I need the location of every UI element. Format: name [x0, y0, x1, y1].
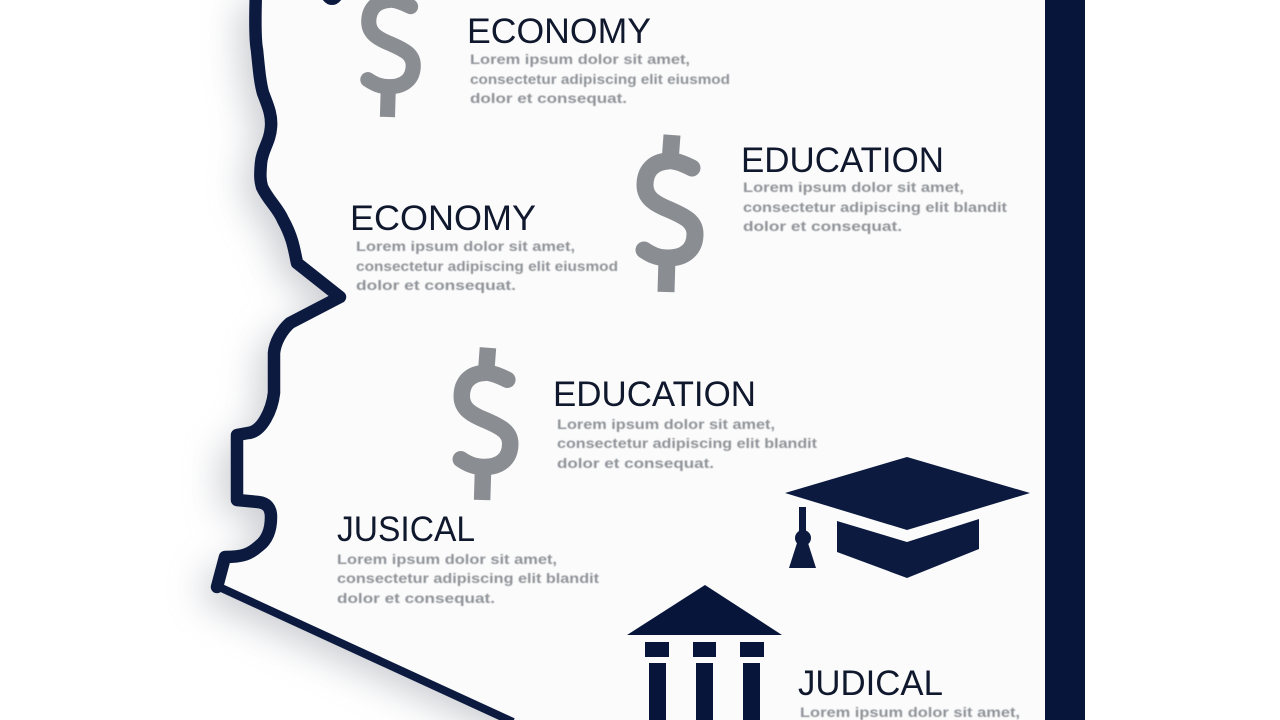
body text: dolor et consequat. — [743, 218, 902, 234]
body text: Lorem ipsum dolor sit amet, — [470, 51, 690, 67]
body text: consectetur adipiscing elit eiusmod — [356, 258, 618, 274]
text block: judical — [798, 664, 1020, 720]
right navy bar — [1045, 0, 1085, 720]
icon: dollar sign 3 — [461, 348, 510, 500]
body text: Lorem ipsum dolor sit amet, — [557, 416, 775, 432]
icon: courthouse pillars — [627, 585, 782, 720]
text block: economy middle — [350, 199, 618, 293]
text block: education lower — [553, 375, 817, 471]
body text: consectetur adipiscing elit blandit — [743, 199, 1007, 215]
icon: graduation cap — [785, 457, 1030, 578]
body text — [356, 238, 618, 293]
body text — [470, 51, 730, 106]
heading: economy: ECONOMY — [467, 12, 651, 51]
icon: dollar sign 2 — [644, 135, 695, 292]
icon: dollar sign 1 — [368, 0, 413, 117]
heading: jusical: JUSICAL — [337, 510, 475, 549]
body text: Lorem ipsum dolor sit amet, — [337, 551, 557, 567]
body text: consectetur adipiscing elit blandit — [337, 570, 599, 586]
heading: judical: JUDICAL — [798, 664, 943, 703]
heading: education: EDUCATION — [553, 375, 756, 414]
text block: economy top — [467, 12, 730, 106]
body text: Lorem ipsum dolor sit amet, — [800, 704, 1020, 720]
heading: education: EDUCATION — [741, 141, 944, 180]
body text: dolor et consequat. — [557, 455, 714, 471]
heading: economy: ECONOMY — [350, 199, 536, 238]
body text — [557, 416, 817, 471]
body text: dolor et consequat. — [470, 90, 627, 106]
text block: jusical — [337, 510, 599, 606]
body text: consectetur adipiscing elit eiusmod — [470, 71, 730, 87]
body text — [743, 179, 1007, 234]
body text: Lorem ipsum dolor sit amet, — [356, 238, 575, 254]
state map shape with outline — [201, 0, 1045, 720]
body text: dolor et consequat. — [337, 590, 495, 606]
body text — [337, 551, 599, 606]
body text: dolor et consequat. — [356, 277, 516, 293]
body text: Lorem ipsum dolor sit amet, — [743, 179, 964, 195]
text block: education upper — [741, 141, 1007, 234]
body text: consectetur adipiscing elit blandit — [557, 435, 817, 451]
